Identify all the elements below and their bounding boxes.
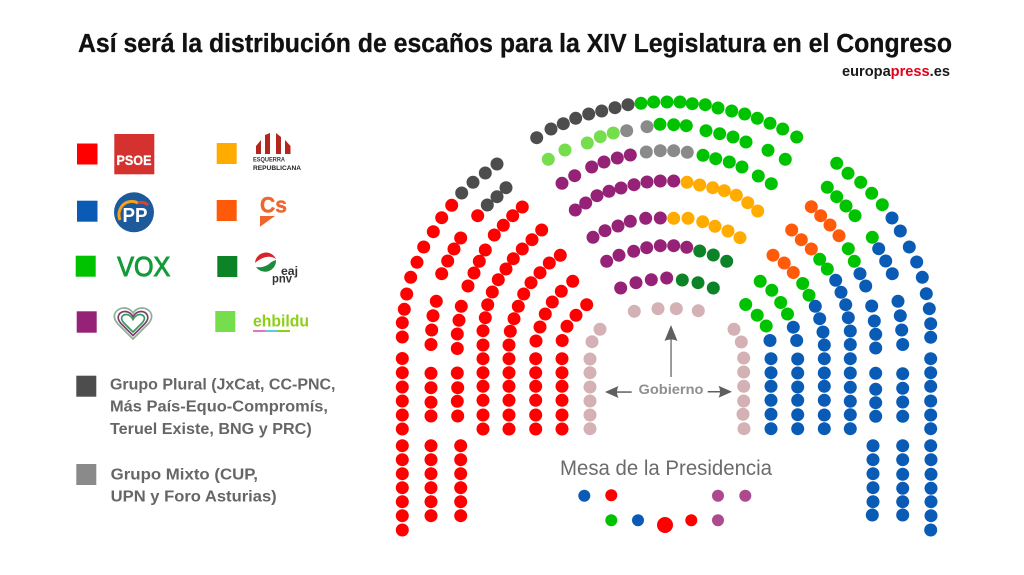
legend swatch: EH Bildu bbox=[215, 311, 235, 332]
logo: Esquerra Republicana bbox=[253, 133, 301, 172]
seats: Grupo Plural bbox=[455, 98, 634, 212]
legend label: Grupo Mixto bbox=[111, 466, 277, 506]
legend swatch: Ciudadanos bbox=[217, 200, 237, 221]
logo: Esquerra Republicana: REPUBLICANA bbox=[253, 165, 301, 172]
seats: Ciudadanos bbox=[766, 200, 846, 279]
legend label: Grupo Plural: Teruel Existe, BNG y PRC) bbox=[110, 421, 312, 438]
legend swatch: Grupo Plural bbox=[76, 376, 96, 397]
seats: PP bbox=[764, 212, 938, 536]
legend swatch: ERC bbox=[217, 143, 237, 164]
logo: PSOE bbox=[114, 134, 154, 174]
seats: Unidas Podemos bbox=[556, 148, 693, 294]
heading: Mesa de la Presidencia: Mesa de la Presidencia bbox=[560, 457, 772, 480]
logo: VOX: VOX bbox=[117, 251, 171, 282]
logo: EAJ-PNV: pnv bbox=[272, 272, 292, 286]
logo: EAJ-PNV: eaj bbox=[281, 264, 298, 278]
seats: Grupo Mixto bbox=[620, 120, 694, 159]
arrow: up to government seats bbox=[664, 325, 678, 377]
logo: Ciudadanos: Cs bbox=[260, 193, 287, 218]
seats: PSOE bbox=[396, 199, 593, 537]
legend label: Grupo Mixto: Grupo Mixto (CUP, bbox=[111, 466, 258, 483]
seats: VOX bbox=[634, 96, 889, 332]
arrow: left to government seats bbox=[605, 386, 632, 398]
logo: Esquerra Republicana: ESQUERRA bbox=[253, 156, 285, 164]
hemicycle seats bbox=[396, 96, 938, 536]
seats: Gobierno bbox=[584, 302, 750, 435]
logo: PSOE: PSOE bbox=[116, 152, 152, 168]
logo: PP: PP bbox=[122, 205, 148, 227]
logo: EH Bildu: ehbildu bbox=[253, 312, 309, 331]
seats: Mesa de la Presidencia bbox=[578, 489, 751, 533]
logo: Unidas Podemos heart bbox=[114, 308, 152, 339]
legend swatch: VOX bbox=[76, 256, 96, 277]
seats: Esquerra Republicana bbox=[667, 176, 764, 244]
logo: EAJ-PNV bbox=[255, 253, 298, 286]
legend swatch: Grupo Mixto bbox=[76, 464, 96, 485]
seats: EH Bildu bbox=[542, 126, 620, 166]
seats: EAJ-PNV bbox=[676, 244, 733, 294]
legend label: Grupo Mixto: UPN y Foro Asturias) bbox=[111, 489, 277, 506]
logo: PP bbox=[114, 192, 154, 232]
legend label: Grupo Plural: Grupo Plural (JxCat, CC-PNC, bbox=[110, 376, 336, 393]
label: Gobierno: Gobierno bbox=[638, 381, 704, 397]
source: europapress.es: europapress.es bbox=[842, 64, 950, 80]
arrow: right to government seats bbox=[708, 386, 732, 398]
title: Así será la distribución de escaños para la XIV Legislatura en el Congreso bbox=[78, 30, 952, 58]
legend swatch: PSOE bbox=[77, 144, 98, 164]
legend: parties bbox=[76, 133, 335, 506]
legend label: Grupo Plural bbox=[110, 376, 336, 438]
legend swatch: PP bbox=[77, 201, 98, 222]
legend swatch: PNV bbox=[217, 256, 237, 277]
legend label: Grupo Plural: Más País-Equo-Compromís, bbox=[110, 399, 328, 416]
legend swatch: Unidas Podemos bbox=[77, 311, 97, 333]
